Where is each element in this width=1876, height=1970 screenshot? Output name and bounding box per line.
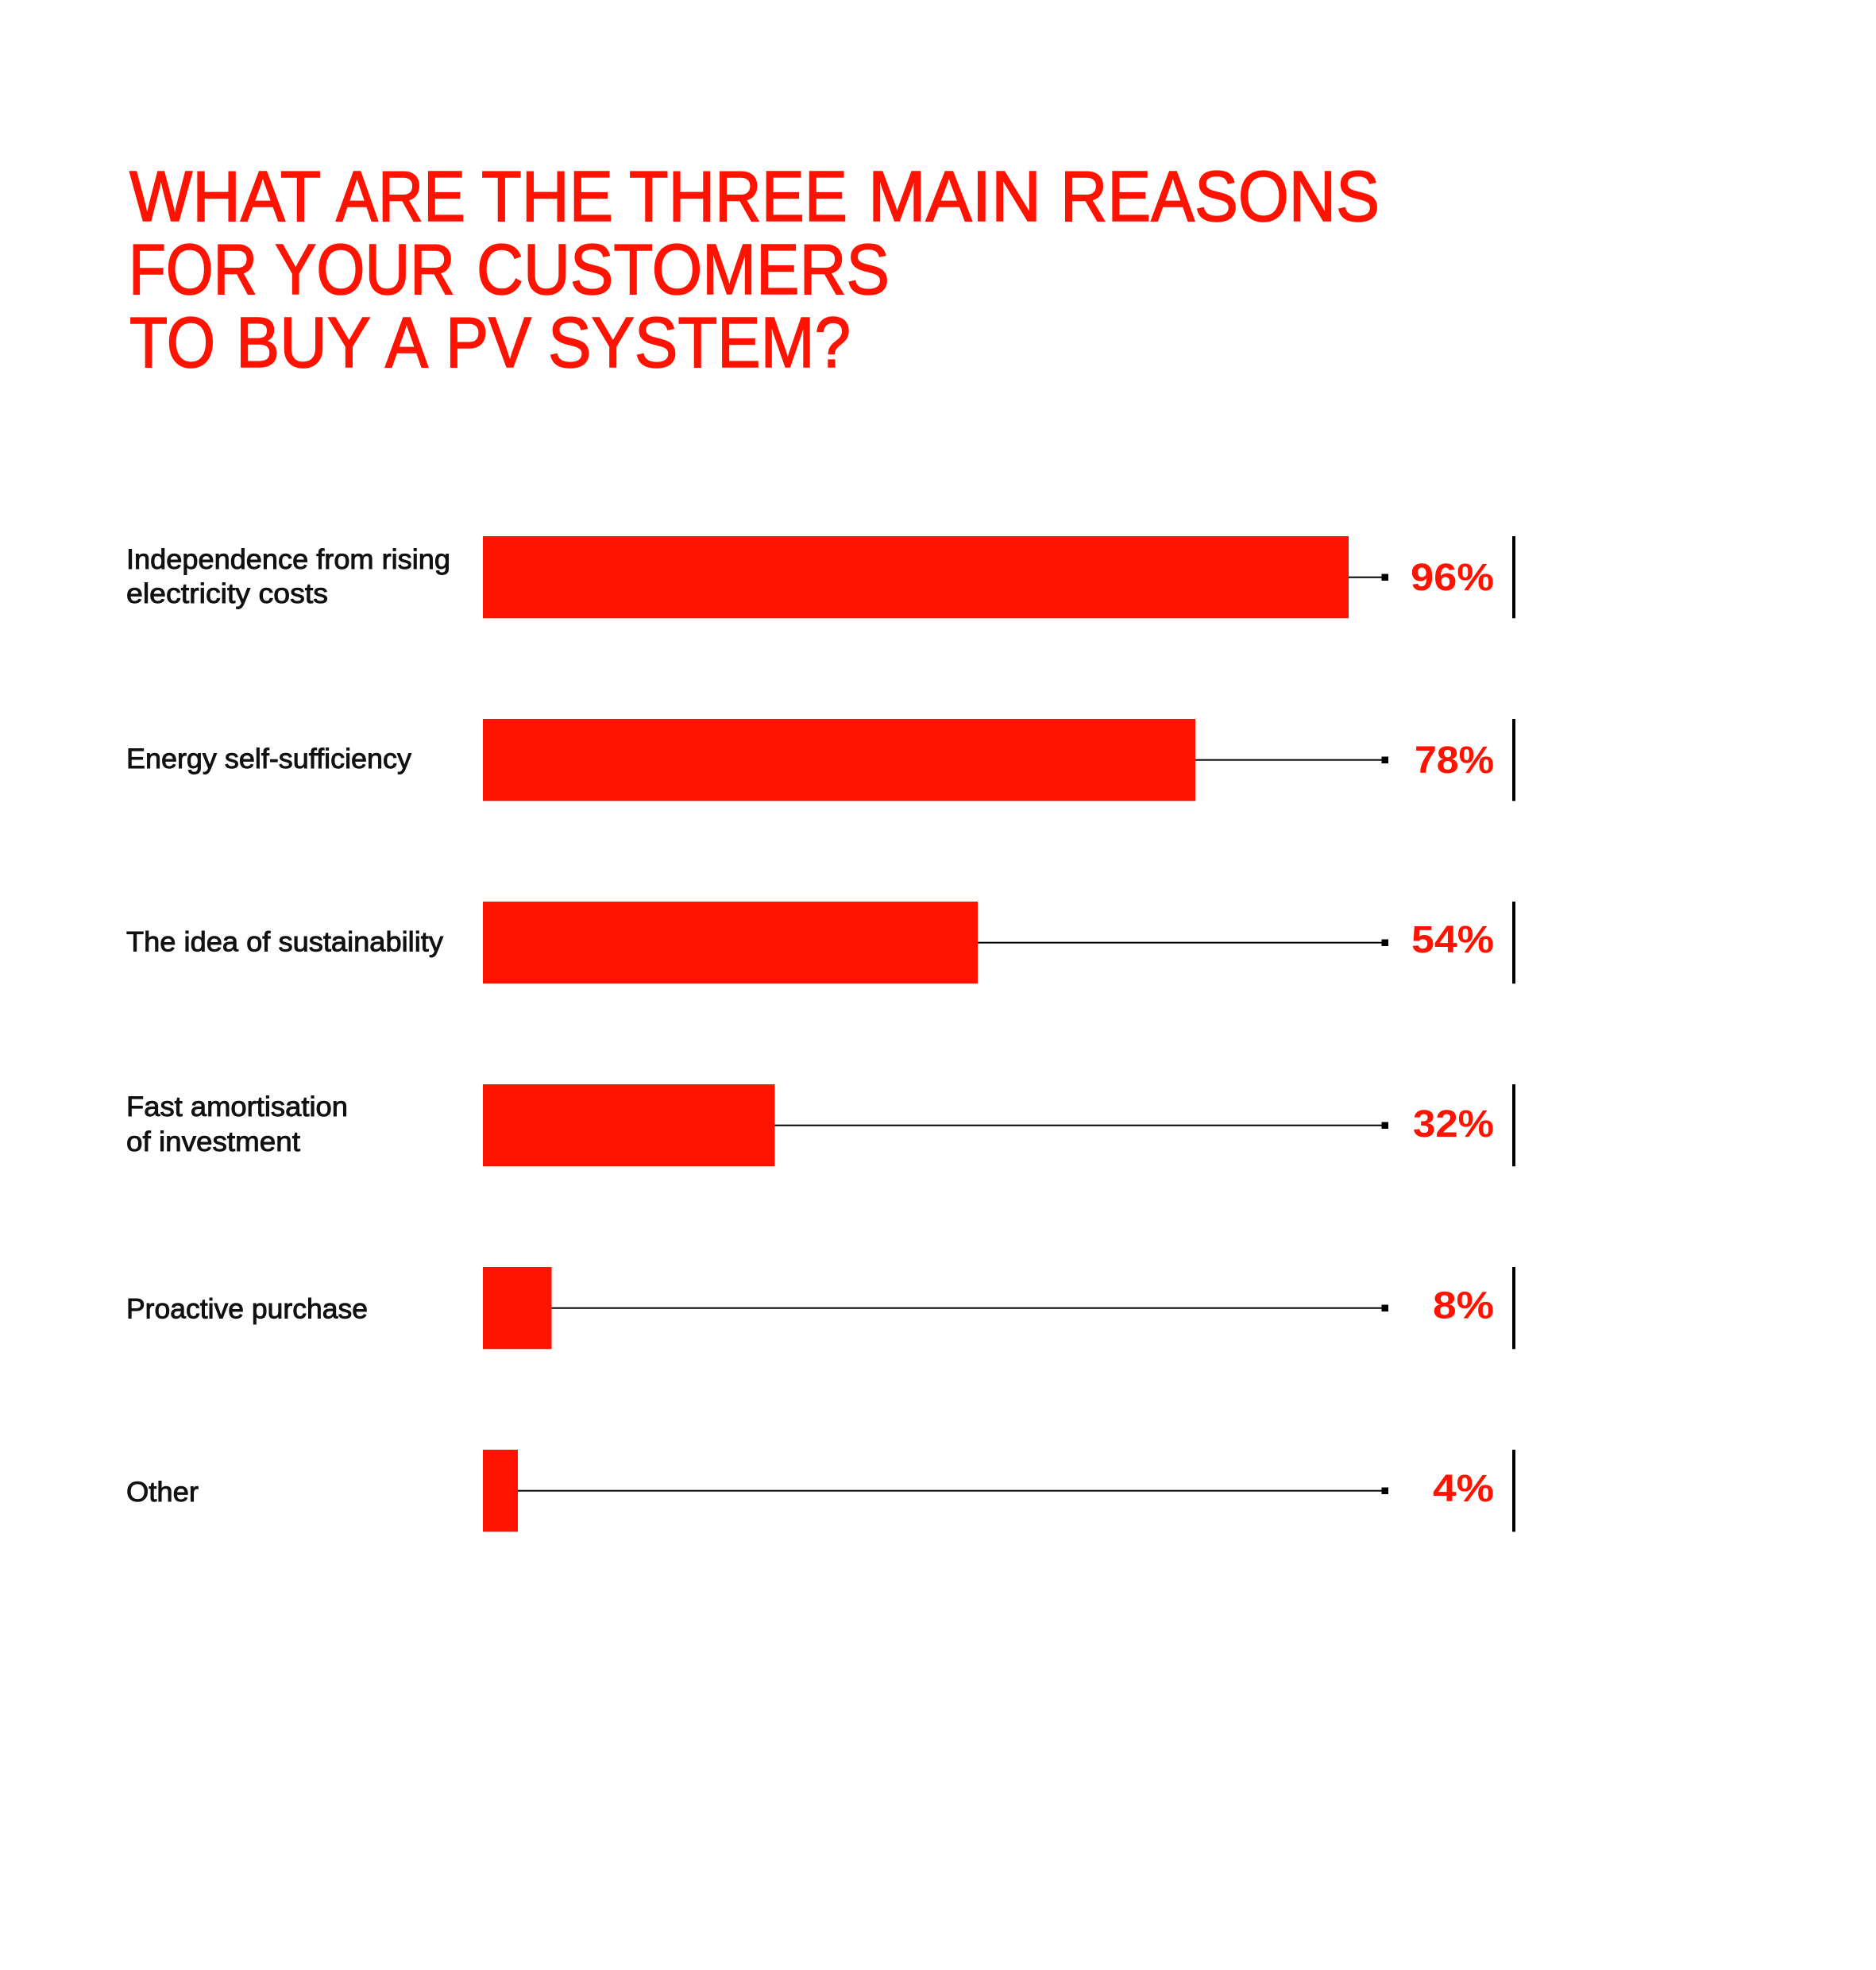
leader end marker <box>1382 574 1388 581</box>
value: 8% <box>1433 1285 1494 1327</box>
end tick <box>1512 719 1515 801</box>
bar chart <box>126 536 1515 1532</box>
end tick <box>1512 902 1515 983</box>
label: Fast amortisation <box>126 1091 348 1122</box>
end tick <box>1512 1450 1515 1532</box>
leader line <box>1349 577 1382 578</box>
leader end marker <box>1382 939 1388 946</box>
bar <box>483 1450 518 1532</box>
leader line <box>1195 759 1382 761</box>
leader line <box>775 1125 1382 1126</box>
label: Proactive purchase <box>126 1293 368 1325</box>
label line 2: electricity costs <box>126 578 328 609</box>
title: ARE <box>336 157 465 237</box>
value: 4% <box>1433 1468 1494 1510</box>
row: energy self-sufficiency, 78% <box>126 719 1515 801</box>
end tick <box>1512 1084 1515 1166</box>
title: PV <box>446 303 531 383</box>
leader end marker <box>1382 756 1388 763</box>
title: BUY <box>236 303 371 383</box>
bar <box>483 719 1195 801</box>
leader end marker <box>1382 1487 1388 1494</box>
label: Independence from rising <box>126 544 450 575</box>
leader line <box>551 1308 1382 1309</box>
title: REASONS <box>1060 157 1380 237</box>
end tick <box>1512 1267 1515 1349</box>
row: proactive purchase, 8% <box>126 1267 1515 1349</box>
value: 32% <box>1413 1103 1494 1145</box>
bar <box>483 1084 775 1166</box>
value: 96% <box>1411 557 1494 599</box>
leader line <box>518 1490 1382 1492</box>
row: the idea of sustainability, 54% <box>126 902 1515 983</box>
title: TO <box>129 303 215 383</box>
label line 2: of investment <box>126 1126 300 1157</box>
value: 54% <box>1411 919 1494 961</box>
title: FOR <box>129 230 257 310</box>
title: WHAT <box>129 157 321 237</box>
value: 78% <box>1415 740 1494 782</box>
title <box>129 157 1380 383</box>
bar <box>483 536 1349 618</box>
leader end marker <box>1382 1304 1388 1311</box>
bar <box>483 1267 551 1349</box>
bar <box>483 902 978 983</box>
title: SYSTEM? <box>548 303 851 383</box>
row: other, 4% <box>126 1450 1515 1532</box>
label: Other <box>126 1477 199 1508</box>
title: MAIN <box>868 157 1041 237</box>
leader end marker <box>1382 1122 1388 1129</box>
end tick <box>1512 536 1515 618</box>
leader line <box>978 942 1382 944</box>
title: A <box>385 303 428 383</box>
label: The idea of sustainability <box>126 926 444 958</box>
label: Energy self-sufficiency <box>126 744 412 774</box>
title: YOUR <box>275 230 455 310</box>
title: THREE <box>629 157 847 237</box>
row: fast amortisation of investment, 32% <box>126 1084 1515 1166</box>
row: independence from rising electricity costs, 96% <box>126 536 1515 618</box>
title: THE <box>481 157 613 237</box>
title: CUSTOMERS <box>477 230 890 310</box>
